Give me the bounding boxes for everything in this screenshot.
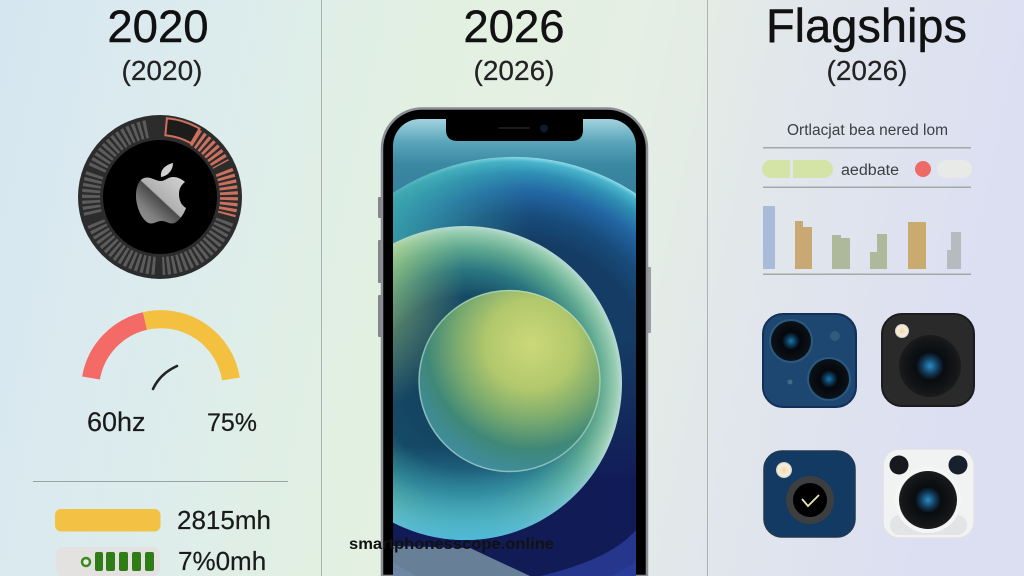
label: 60hz: 60hz — [87, 407, 146, 437]
icon: navy camera — [764, 451, 855, 537]
label: 2815mh: 2815mh — [177, 505, 271, 535]
wallpaper — [393, 119, 636, 576]
notch — [446, 119, 583, 141]
icon: blue dual camera — [763, 314, 856, 407]
label: 75%: 75% — [207, 409, 257, 437]
heading: 2020: 2020 — [107, 1, 209, 52]
panel: Flagships — [762, 0, 974, 538]
battery indicator: green — [56, 547, 160, 576]
watermark: smartphonesscope.online — [349, 536, 554, 553]
legend row: aedbate — [841, 162, 899, 179]
phone — [378, 107, 651, 576]
subheading: (2020): (2020) — [122, 55, 202, 86]
battery bar: yellow — [55, 509, 160, 532]
subheading: (2026): (2026) — [827, 55, 907, 86]
bar chart — [763, 206, 971, 275]
subheading: (2026): (2026) — [474, 55, 554, 86]
panel: 2020 — [33, 1, 288, 576]
heading: 2026: 2026 — [463, 1, 565, 52]
icon: white camera — [883, 449, 974, 538]
caption: Ortlacjat bea nered lom — [787, 122, 948, 139]
icon: dial with apple logo — [78, 115, 242, 279]
heading: Flagships: Flagships — [766, 0, 967, 52]
panel: 2026 — [350, 10, 651, 576]
icon: black camera — [882, 314, 974, 406]
label: 7%0mh: 7%0mh — [178, 546, 266, 576]
gauge — [91, 319, 231, 389]
legend row — [762, 160, 972, 179]
